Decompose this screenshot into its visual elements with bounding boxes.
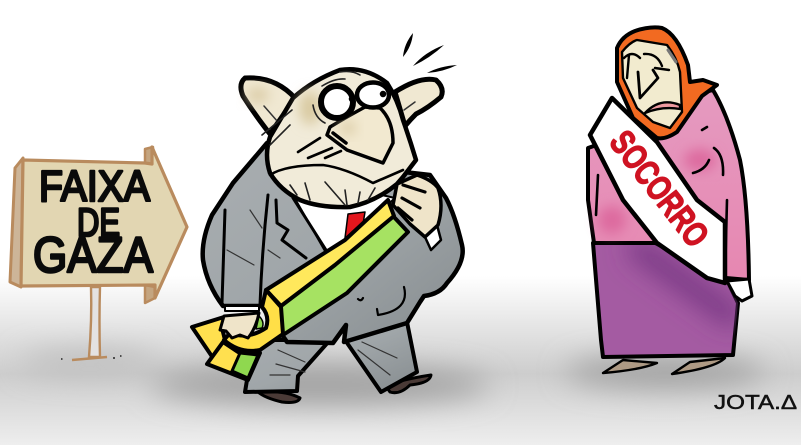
left cuff — [225, 306, 259, 311]
arrow notches — [145, 147, 155, 303]
sign side — [10, 158, 23, 287]
sash tail upper — [192, 317, 225, 358]
post — [89, 287, 100, 357]
legs — [245, 322, 417, 392]
mouth line — [270, 138, 403, 183]
shoes — [258, 375, 431, 402]
shoes — [603, 358, 725, 374]
signpost — [10, 147, 187, 360]
left eye — [321, 86, 353, 118]
head — [267, 69, 416, 207]
right ear — [395, 79, 442, 126]
belly detail — [358, 287, 405, 315]
man with presidential sash — [192, 69, 463, 402]
sign face — [21, 147, 187, 298]
signature: JOTA.Δ — [714, 392, 797, 414]
lapel and sleeve lines — [222, 195, 326, 305]
sash text: SOCORRO — [602, 123, 716, 255]
left hand — [220, 313, 259, 338]
left ear — [241, 78, 295, 134]
sash tail lower — [207, 342, 260, 380]
hand — [727, 279, 752, 301]
blouse — [588, 90, 749, 282]
nose — [327, 107, 393, 163]
face shading — [299, 91, 321, 125]
nose — [638, 70, 658, 98]
woman with SOCORRO sash — [588, 27, 752, 374]
shirt — [290, 190, 395, 251]
impact lines — [403, 33, 457, 73]
mouth — [645, 102, 680, 113]
sign lettering: FAIXA — [39, 162, 151, 211]
sign lettering: GAZA — [33, 227, 154, 283]
sash rosette ring — [224, 290, 283, 351]
head lines — [262, 71, 360, 145]
blouse shading — [684, 149, 716, 171]
sash green band — [279, 216, 408, 335]
jacket — [203, 143, 463, 343]
hair shadow — [668, 50, 676, 62]
right eye — [357, 82, 389, 108]
skirt shading — [640, 250, 730, 315]
right cuff — [425, 225, 441, 250]
skirt — [593, 243, 738, 357]
tie — [345, 212, 365, 238]
white sash — [590, 98, 725, 283]
pupils — [352, 94, 383, 99]
headscarf — [617, 27, 717, 138]
beard strokes — [290, 182, 375, 205]
sign lettering — [33, 162, 154, 283]
raised hand — [393, 175, 441, 237]
sign lettering: DE — [77, 201, 120, 245]
arm lines — [596, 127, 727, 278]
sash yellow band — [266, 200, 394, 306]
face — [622, 40, 682, 128]
ground shadows — [20, 350, 765, 405]
eyes and brows — [624, 54, 669, 78]
